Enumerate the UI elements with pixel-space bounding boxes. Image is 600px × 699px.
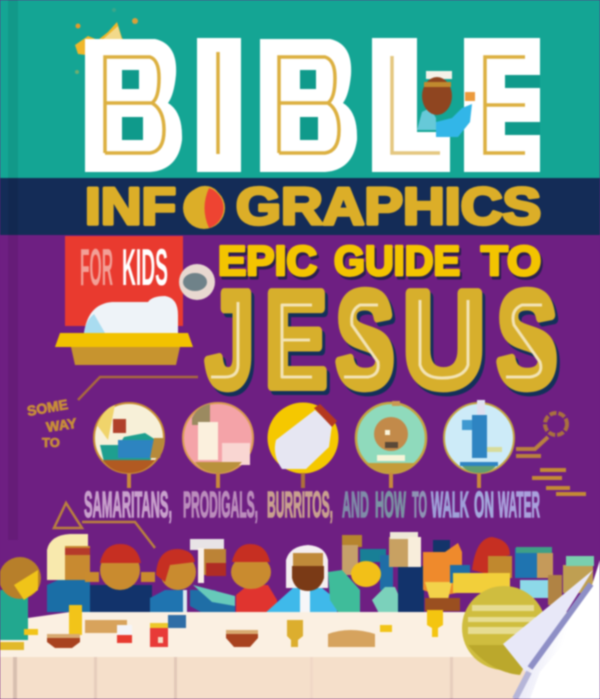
tagline: AND [342,484,369,525]
badge: gold medal seal [453,573,546,675]
heading: EPIC GUIDE TO: TO [483,240,543,287]
subtitle: INFOGRAPHICS: GRAPHICS [236,178,541,236]
icon: manger with baby [55,296,193,365]
figure: person in blue hood [515,547,553,598]
title: BIBLE: I [199,0,239,212]
heading: EPIC GUIDE TO: EPIC [220,240,319,287]
title: BIBLE: B [261,0,355,212]
panel: teal header background [0,0,600,179]
icon: triangle doodle with line [54,503,155,548]
panel: navy band [0,178,600,236]
heading: JESUS: E [268,268,330,419]
figure: person with red hair right [450,537,512,583]
heading: EPIC GUIDE TO: GUIDE [336,240,462,287]
note: left doodle scribble: TO [42,435,60,450]
heading: JESUS: J [206,264,254,415]
title: BIBLE: L [372,0,450,212]
title: BIBLE: B [86,0,180,212]
figure: disciple in teal with yellow face [328,535,405,625]
figure: person in red [231,544,277,615]
icon: round badge [179,264,215,300]
heading: JESUS: S [497,264,557,415]
tagline: SAMARITANS, [84,484,172,525]
icon: circle 5 walking on water [444,400,514,488]
note: left doodle scribble: WAY [45,415,78,435]
panel: purple background [0,235,600,699]
icon: right doodle and scribble [516,413,586,494]
connector line from manger [78,377,198,400]
panel: red square badge [65,236,183,326]
figure: person far right [548,556,594,605]
icon: character on the L [417,71,475,137]
panel: table and cloth [0,612,600,699]
gold inline strokes [105,52,525,154]
title: BIBLE [85,0,540,212]
B and E counters [122,70,540,140]
note: left doodle scribble [26,396,78,450]
icon: pie chart letter O [183,187,225,229]
heading: JESUS: S [500,268,560,419]
tagline [84,484,540,525]
icon: circle 2 prodigal [183,403,253,488]
icon: table food and cups [0,605,443,650]
icon: circle 4 face [356,401,426,488]
icon: circle 1 samaritan [94,403,165,488]
figure: person in cream veil [47,534,90,612]
tagline: TO [412,484,427,525]
subtitle: INFOGRAPHICS: O [188,178,222,236]
heading: JESUS: U [406,268,488,419]
heading: EPIC GUIDE TO: EPIC [218,237,317,284]
heading: JESUS: E [265,264,327,415]
figure: person turning in blue [150,549,196,620]
figure: person with veil in navy [389,532,424,614]
white letter bodies [85,38,540,172]
subtitle: INFOGRAPHICS [85,178,541,236]
panel: book spine shading [8,0,18,540]
tagline: HOW [375,484,406,525]
title: BIBLE: E [464,0,536,212]
figure: Jesus [263,545,337,625]
illustration: last supper figures [0,532,594,650]
tagline: ON [474,484,494,525]
icon: crown [75,8,138,74]
figure: orange person [423,540,462,611]
figure: person in white turban [190,539,235,616]
heading: EPIC GUIDE TO [218,237,543,287]
tagline: WALK [431,484,469,525]
heading: EPIC GUIDE TO: TO [481,237,541,284]
tagline: BURRITOS, [267,484,333,525]
heading: JESUS: S [336,264,394,415]
figure: person with red hair in navy [85,544,155,615]
heading: JESUS: U [403,264,485,415]
icon: page curl [503,560,600,699]
heading: EPIC GUIDE TO: GUIDE [334,237,460,284]
figure: person far left [0,557,41,650]
text: FOR KIDS: FOR [80,239,113,297]
heading: JESUS: J [209,268,257,419]
icon: circle 3 burrito [268,402,338,488]
text: KIDS [122,239,168,297]
subtitle: INFOGRAPHICS: INF [85,178,176,236]
note: left doodle scribble: SOME [26,396,69,419]
heading: JESUS: S [339,268,397,419]
heading: JESUS [206,264,560,419]
cream inline strokes [211,300,542,378]
tagline: PRODIGALS, [183,484,258,525]
